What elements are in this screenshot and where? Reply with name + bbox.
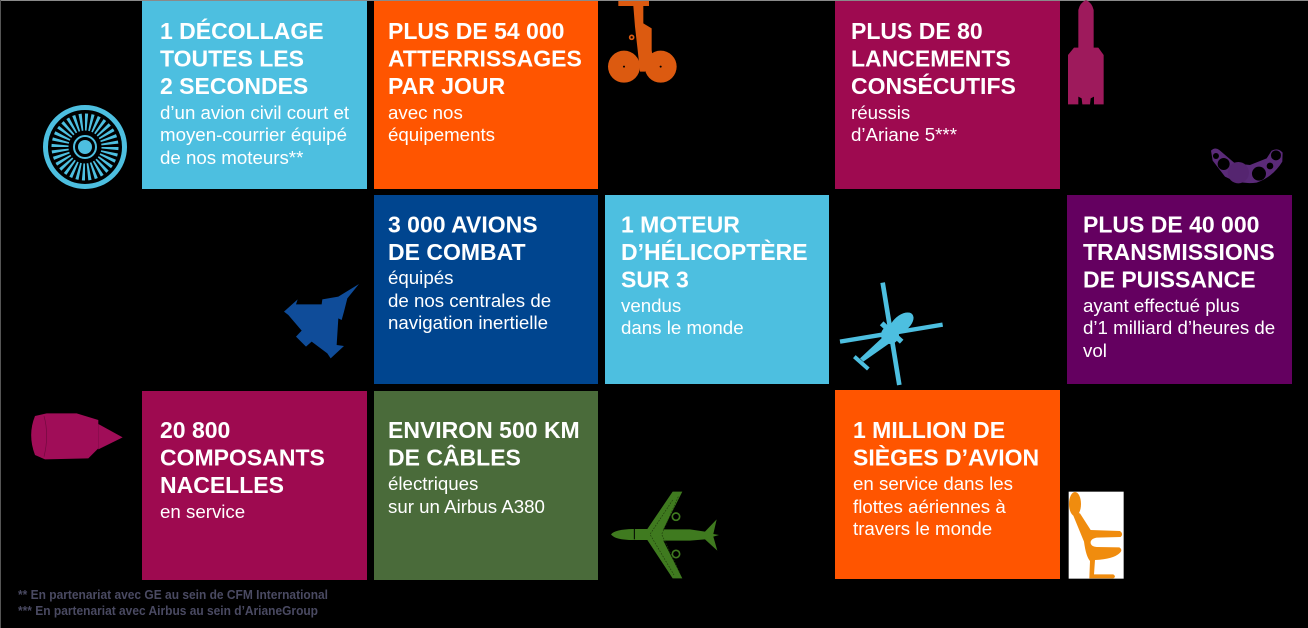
text: avions de combat: équipés [388, 267, 453, 288]
heading: câbles: DE CÂBLES [388, 444, 521, 470]
heading: sièges d'avion: 1 MILLION DE [853, 417, 1005, 443]
text: câbles: sur un Airbus A380 [388, 496, 545, 517]
footnotes: *** En partenariat avec Airbus au sein d’ArianeGroup [18, 604, 318, 618]
heading: moteur d'hélicoptère: SUR 3 [621, 266, 689, 292]
heading: moteur d'hélicoptère: D’HÉLICOPTÈRE [621, 238, 808, 265]
heading: transmissions: DE PUISSANCE [1083, 266, 1256, 292]
text: transmissions: ayant effectué plus [1083, 295, 1240, 316]
text: lancements: d’Ariane 5*** [851, 124, 957, 145]
text: transmissions: d’1 milliard d’heures de [1083, 317, 1275, 338]
heading: composants nacelles: 20 800 [160, 417, 230, 443]
text: décollage: moyen-courrier équipé [160, 124, 347, 145]
panel: 1 décollage [142, 1, 367, 189]
heading: lancements: LANCEMENTS [851, 46, 1011, 72]
heading: composants nacelles: COMPOSANTS [160, 444, 325, 470]
text: atterrissages: équipements [388, 124, 495, 145]
text: sièges d'avion: travers le monde [853, 518, 992, 539]
panel: composants nacelles [142, 391, 367, 580]
icon: turbine [46, 108, 124, 186]
heading: atterrissages: PAR JOUR [388, 73, 506, 99]
heading: composants nacelles: NACELLES [160, 472, 284, 498]
heading: avions de combat: 3 000 AVIONS [388, 212, 538, 238]
footnotes: ** En partenariat avec GE au sein de CFM International [18, 588, 328, 602]
heading: transmissions: TRANSMISSIONS [1083, 239, 1275, 265]
text: moteur d'hélicoptère: dans le monde [621, 317, 744, 338]
text: composants nacelles: en service [160, 501, 245, 522]
heading: sièges d'avion: SIÈGES D’AVION [853, 444, 1039, 470]
heading: moteur d'hélicoptère: 1 MOTEUR [621, 212, 740, 238]
heading: décollage: 1 DÉCOLLAGE [160, 17, 324, 44]
footnotes [18, 588, 328, 618]
text: avions de combat: de nos centrales de [388, 290, 551, 311]
heading: avions de combat: DE COMBAT [388, 239, 526, 265]
text: câbles: électriques [388, 473, 478, 494]
panel: transmissions [1067, 195, 1292, 384]
heading: lancements: CONSÉCUTIFS [851, 72, 1016, 99]
panel: câbles [374, 391, 598, 580]
text: lancements: réussis [851, 102, 910, 123]
text: transmissions: vol [1083, 340, 1107, 361]
text: décollage: de nos moteurs** [160, 147, 303, 168]
heading: atterrissages: PLUS DE 54 000 [388, 18, 564, 44]
panel: avions de combat [374, 195, 598, 384]
heading: décollage: 2 SECONDES [160, 73, 308, 99]
icon: nacelle [31, 413, 123, 459]
panel: lancements [835, 1, 1060, 189]
text: sièges d'avion: en service dans les [853, 473, 1013, 494]
text: moteur d'hélicoptère: vendus [621, 295, 681, 316]
panel: sièges d'avion [835, 390, 1060, 579]
icon: seat [1069, 492, 1124, 579]
text: décollage: d’un avion civil court et [160, 102, 350, 123]
text: atterrissages: avec nos [388, 102, 463, 123]
icon: landing gear [608, 1, 677, 83]
heading: décollage: TOUTES LES [160, 46, 304, 72]
panel: atterrissages [374, 1, 598, 189]
heading: transmissions: PLUS DE 40 000 [1083, 212, 1259, 238]
icon: airplane [611, 492, 719, 578]
icon: fighter jet [284, 284, 359, 358]
heading: lancements: PLUS DE 80 [851, 18, 983, 44]
icon: power transmission [1211, 148, 1283, 183]
panel: moteur d'hélicoptère [605, 195, 829, 384]
icon: rocket [1068, 0, 1104, 104]
icon: helicopter [840, 283, 943, 385]
text: avions de combat: navigation inertielle [388, 312, 548, 333]
heading: câbles: ENVIRON 500 KM [388, 417, 580, 443]
heading: atterrissages: ATTERRISSAGES [388, 46, 582, 72]
text: sièges d'avion: flottes aériennes à [853, 496, 1006, 517]
